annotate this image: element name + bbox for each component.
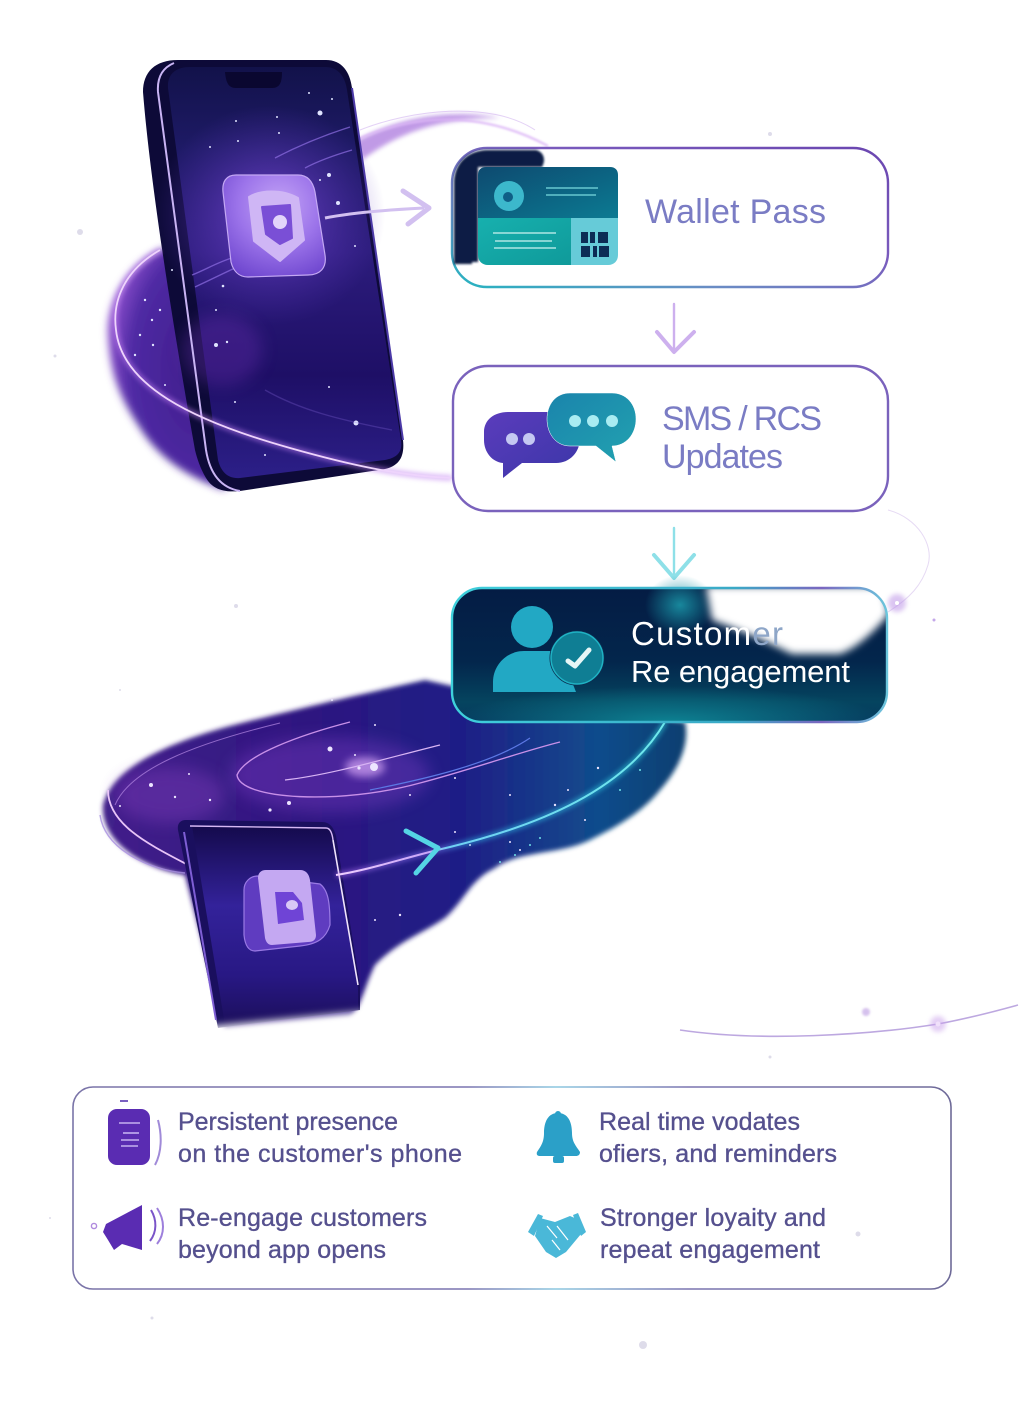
label: customer: Customer: [631, 615, 783, 652]
scattered specks: [49, 132, 860, 1349]
phone: main device with app icon: [134, 60, 403, 491]
QR code: [581, 232, 609, 257]
orbit lines: [100, 722, 560, 873]
icon: phone document: [108, 1100, 161, 1165]
panel: wallet pass: [452, 148, 888, 287]
arc: lower phone to customer re-engagement: [336, 722, 665, 875]
phone body: [143, 60, 403, 491]
panel: benefits: [73, 1087, 951, 1289]
icon: chat bubbles: [484, 393, 636, 478]
text: stronger loyalty: Stronger loyaity and: [600, 1204, 826, 1232]
text: real time updates: [599, 1108, 837, 1168]
white fade under lower phone: [195, 1010, 390, 1060]
arrow: phone to wallet pass: [325, 191, 429, 224]
stars on phone: [134, 92, 358, 456]
text: re-engage customers: beyond app opens: [178, 1236, 386, 1264]
text: real time updates: Real time vodates: [599, 1108, 800, 1136]
arrow head: cyan chevron: [406, 831, 438, 873]
arrow: wallet pass to sms: [657, 304, 694, 352]
teal glow under arrow tip: [645, 575, 715, 635]
label: sms rcs: SMS / RCS: [662, 400, 822, 438]
cosmic band around lower phone: [100, 680, 686, 1030]
screen glow: [155, 105, 385, 325]
bright arc crossing the phone: [115, 250, 452, 478]
panel: sms rcs updates: [453, 366, 888, 511]
streaks on phone: [192, 127, 392, 430]
text: re-engage customers: [178, 1204, 427, 1264]
app icon: [244, 870, 330, 951]
app icon: [223, 175, 325, 277]
text: persistent presence: on the customer's phone: [178, 1140, 462, 1168]
icon: bell: [537, 1111, 580, 1163]
sparkle trail: bottom right: [680, 1005, 1018, 1036]
text: re-engage customers: Re-engage customers: [178, 1204, 427, 1232]
phone notch: [225, 72, 282, 88]
purple nebula glow: [230, 737, 430, 813]
top phone swirl behind the phone: [108, 111, 548, 490]
icon: customer with check: [493, 606, 604, 692]
phone screen: [168, 67, 401, 478]
white washed area: [706, 586, 888, 654]
arrow: sms to re-engagement: [654, 528, 694, 578]
text: persistent presence: Persistent presence: [178, 1108, 398, 1136]
shield: [249, 192, 304, 261]
panel: customer re-engagement: [452, 575, 888, 722]
text: real time updates: ofiers, and reminders: [599, 1140, 837, 1168]
icon: handshake: [528, 1213, 586, 1258]
text: stronger loyalty: [600, 1204, 826, 1264]
phone edge highlights: [184, 826, 358, 1020]
label: updates: Updates: [662, 438, 783, 476]
label: wallet pass: Wallet Pass: [645, 193, 826, 231]
icon: wallet card: [478, 167, 618, 265]
icon: megaphone: [91, 1205, 163, 1250]
label: re engagement: Re engagement: [631, 654, 850, 689]
dark corner of wallet pass panel: [454, 150, 544, 264]
text: persistent presence: [178, 1108, 462, 1168]
sparkle: top right of re-engagement panel: [888, 510, 936, 622]
phone: lower device with app icon: [178, 820, 360, 1028]
text: stronger loyalty: repeat engagement: [600, 1236, 820, 1264]
stars on band: [119, 699, 641, 921]
phone edge highlight: [158, 63, 240, 491]
